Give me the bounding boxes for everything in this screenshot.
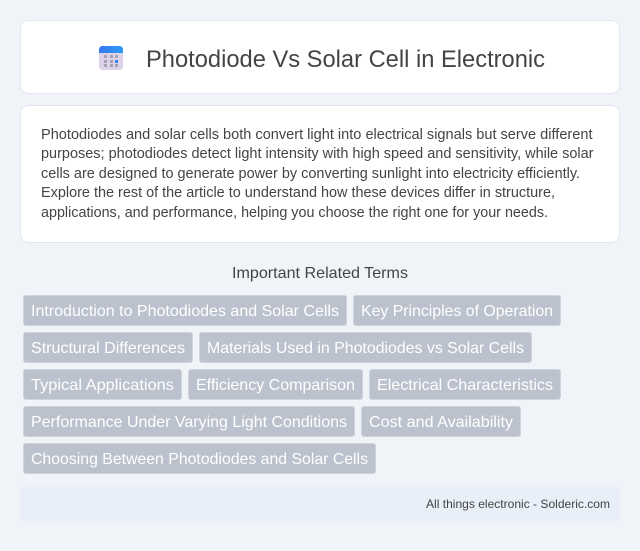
tag list — [24, 296, 560, 474]
tag: typical applications — [24, 370, 182, 400]
tag: key principles: Key Principles of Operation — [361, 303, 553, 320]
panel: intro paragraph: cells are designed to generate power by converting sunlight into electricity efficiently. — [41, 166, 580, 182]
panel: intro paragraph: applications, and performance, helping you choose the right one for your needs. — [41, 205, 548, 221]
footer: All things electronic - Solderic.com — [426, 497, 610, 511]
panel: intro paragraph: Explore the rest of the article to understand how these devices differ in structure, — [41, 185, 555, 201]
tag: efficiency comparison: Efficiency Comparison — [196, 377, 355, 394]
tag: materials: Materials Used in Photodiodes vs Solar Cells — [207, 340, 524, 357]
tag: efficiency comparison — [188, 370, 362, 400]
tag: structural differences: Structural Differences — [31, 340, 185, 357]
tag: cost: Cost and Availability — [369, 414, 513, 431]
tag: performance: Performance Under Varying Light Conditions — [31, 414, 347, 431]
tag: choosing — [24, 444, 376, 474]
tag: performance — [24, 406, 354, 436]
tag: introduction — [24, 296, 346, 326]
title: Photodiode Vs Solar Cell in Electronic — [146, 46, 545, 73]
panel: intro paragraph: purposes; photodiodes detect light intensity with high speed and sensitivity, while solar — [41, 146, 594, 162]
tag: choosing: Choosing Between Photodiodes and Solar Cells — [31, 451, 368, 468]
panel: header card — [20, 20, 620, 94]
tag: key principles — [354, 296, 560, 326]
tag: structural differences — [24, 332, 192, 362]
tag: materials — [200, 332, 532, 362]
tag: introduction: Introduction to Photodiodes and Solar Cells — [31, 303, 339, 320]
heading: important related terms: Important Related Terms — [232, 265, 408, 282]
tag: electrical characteristics: Electrical Characteristics — [377, 377, 553, 394]
tag: electrical characteristics — [370, 370, 560, 400]
icon: calendar — [99, 46, 123, 70]
panel: intro paragraph — [20, 106, 620, 242]
tag: typical applications: Typical Applications — [31, 377, 174, 394]
tag: cost — [362, 406, 520, 436]
panel: intro paragraph: Photodiodes and solar cells both convert light into electrical signals but serve different — [41, 127, 592, 143]
footer — [20, 487, 620, 521]
